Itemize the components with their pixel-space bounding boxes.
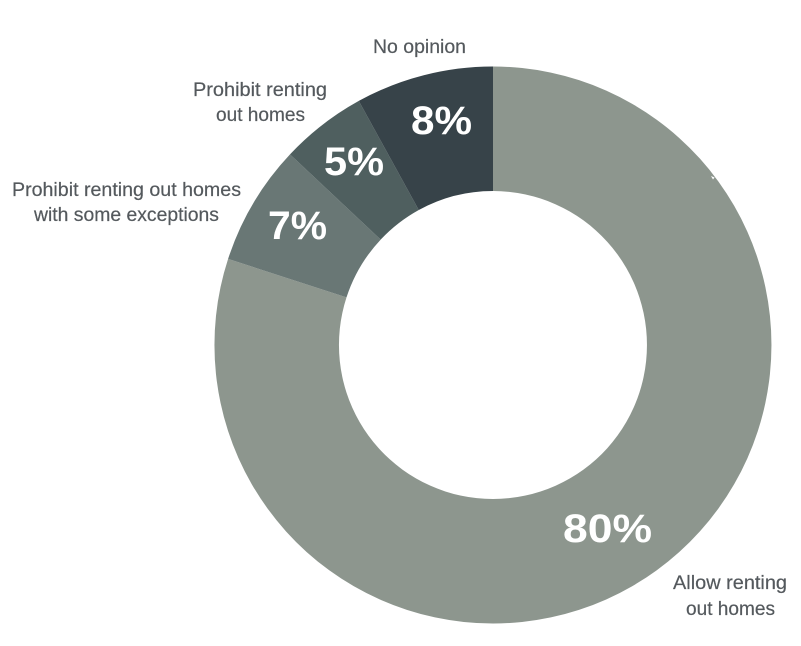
label: prohibit renting out homes: Prohibit renting	[193, 80, 327, 101]
label: no opinion: No opinion	[373, 37, 466, 58]
label: allow renting out homes: Allow renting	[673, 573, 787, 594]
segment: allow renting out homes 80%	[214, 66, 771, 623]
value: 7%: 7%	[268, 204, 327, 248]
label: allow renting out homes: out homes	[686, 599, 775, 620]
label: prohibit renting out homes: out homes	[216, 105, 305, 126]
label: prohibit with some exceptions	[12, 180, 241, 226]
segment: prohibit renting out homes 5%	[290, 101, 419, 240]
label: prohibit renting out homes	[193, 80, 327, 126]
segment: prohibit with some exceptions 7%	[228, 154, 381, 297]
segment: no opinion 8%	[359, 66, 493, 210]
label: prohibit with some exceptions: with some exceptions	[33, 205, 219, 226]
label: prohibit with some exceptions: Prohibit renting out homes	[12, 180, 241, 201]
value: 8%: 8%	[411, 99, 472, 143]
value: 5%: 5%	[324, 140, 384, 184]
label: allow renting out homes	[673, 573, 787, 620]
value: 80%: 80%	[563, 507, 652, 551]
